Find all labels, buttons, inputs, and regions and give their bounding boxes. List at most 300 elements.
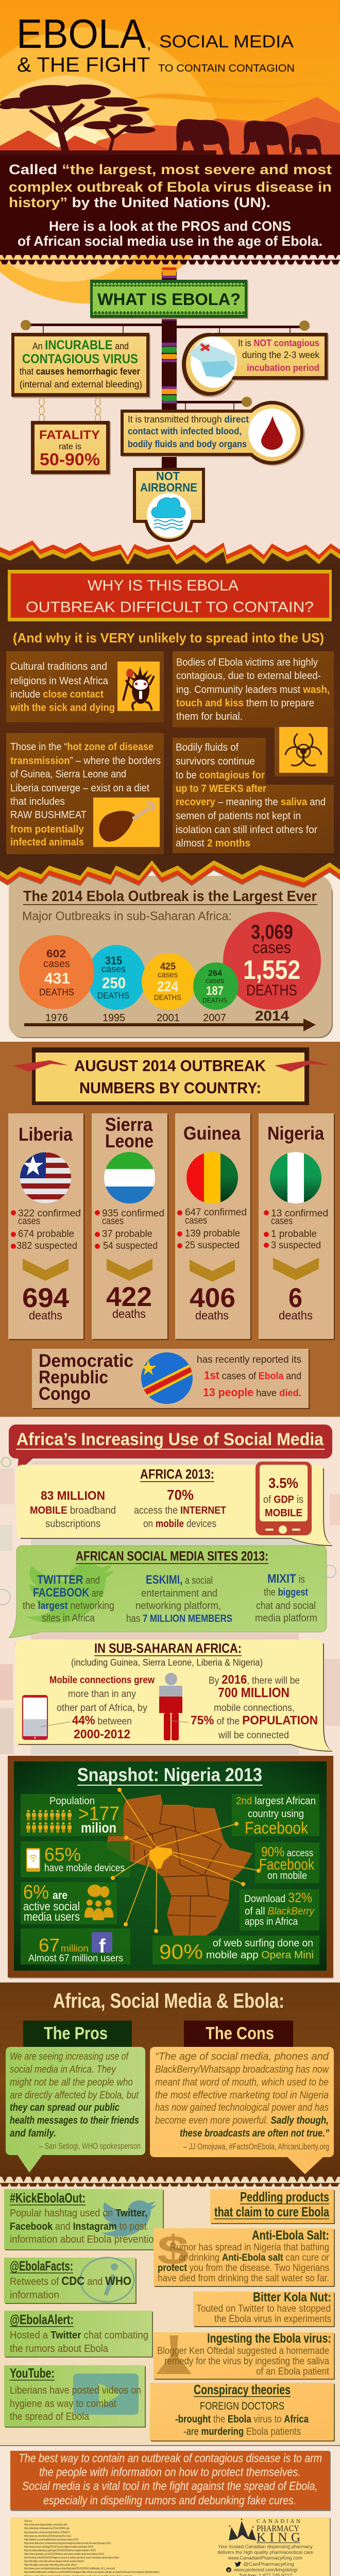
- panel: Sierra Leone: 422: [106, 1282, 152, 1312]
- panel: sub-Saharan Africa: other part of Africa, by: [57, 1703, 147, 1714]
- panel: Guinea: 406: [190, 1283, 235, 1313]
- panel: Sierra Leone: cases: [102, 1216, 124, 1227]
- panel: peddling products: [210, 2189, 335, 2224]
- stat: social media users: 6%: [23, 1882, 49, 1903]
- panel: the pros: We are seeing increasing use of: [10, 2051, 129, 2062]
- panel: anti-Ebola salt: or drinking Anti-Ebola salt can cure or: [179, 2252, 330, 2263]
- panel: largest outbreak bubbles: Major Outbreaks in sub-Saharan Africa:: [22, 909, 232, 923]
- icon: YouTube play watermark: [73, 2374, 139, 2415]
- sign: not airborne: [133, 468, 205, 542]
- panel: bodily fluids: survivors continue: [176, 756, 255, 767]
- timeline years: 1976: [45, 1012, 68, 1024]
- stat: Opera Mini: [159, 1938, 314, 1963]
- panel: Sierra Leone: 935 confirmed: [102, 1208, 164, 1219]
- company contact details: delivers the high quality pharmaceutical care: [217, 2550, 313, 2555]
- panel: KickEbolaOut: Facebook and Instagram to post: [10, 2221, 147, 2232]
- icon: information watermark: [80, 2258, 134, 2302]
- title: SOCIAL MEDIA: [159, 32, 294, 52]
- sources list: http://afrodigit.com/south-africas-largest-mobile-social-network/: [24, 2560, 84, 2563]
- panel: African social media sites: TWITTER and: [37, 1573, 100, 1587]
- panel: Democratic Republic Congo: Republic: [39, 1367, 108, 1387]
- stat: largest Facebook country: country using: [248, 1808, 304, 1820]
- panel: Sierra Leone: Sierra: [105, 1114, 153, 1135]
- sources list: Sources:: [24, 2520, 32, 2523]
- stat: BlackBerry apps: [244, 1890, 315, 1927]
- panel: African social media sites: the biggest: [264, 1587, 308, 1598]
- panel: KickEbolaOut: [4, 2189, 164, 2250]
- panel: KickEbolaOut: information about Ebola prevention: [10, 2234, 159, 2245]
- bubble 1995: DEATHS: [97, 991, 129, 1001]
- panel: Guinea: [175, 1113, 251, 1340]
- timeline years: 2007: [203, 1012, 226, 1024]
- map of Africa: [106, 1794, 252, 1936]
- signpost pole: [162, 267, 177, 468]
- panel: EbolaAlert: Hosted a Twitter chat combating: [10, 2330, 148, 2341]
- icon: blood drop: [261, 416, 283, 450]
- stat: largest Facebook country: Facebook: [245, 1819, 309, 1837]
- icon: mobile phone with GDP stat: 3.5%: [268, 1475, 298, 1491]
- icon: mobile phone with GDP stat: MOBILE: [265, 1507, 302, 1519]
- stat: largest Facebook country: [236, 1795, 316, 1837]
- panel: Democratic Republic Congo: 13 people have died.: [203, 1386, 301, 1399]
- panel: Guinea: Guinea: [183, 1123, 241, 1144]
- stat: Facebook users: million: [61, 1943, 89, 1954]
- sources list: http://afrodigit.com/social-networking-sites-south-africa/: [24, 2564, 77, 2567]
- panel: Sierra Leone: 37 probable: [102, 1229, 152, 1240]
- stat: social media users: [23, 1882, 113, 1923]
- bubble 1976: DEATHS: [39, 987, 74, 997]
- stat: Facebook users: 67: [39, 1935, 60, 1956]
- bubble 2014: cases: [252, 938, 291, 957]
- sources list: [24, 2520, 160, 2576]
- sources list: http://socialmediatoday.org/slogan/2014/02/03/african-digital-statistics-2014/: [24, 2549, 96, 2552]
- panel: EbolaAlert: the rumors about Ebola: [10, 2343, 109, 2354]
- icon: tribal mask: [117, 662, 160, 711]
- stat: social media users: media users: [24, 1910, 80, 1923]
- panel: hot zone bushmeat: transmission” – where the borders: [10, 755, 161, 767]
- sign: not contagious during incubation: It is NOT contagious: [238, 338, 319, 348]
- icon: person chart: [159, 1673, 182, 1740]
- panel: hot zone bushmeat: [6, 733, 164, 854]
- bubble 2001: cases: [158, 971, 178, 979]
- panel: Democratic Republic Congo: has recently reported its: [197, 1354, 301, 1365]
- panel: EbolaFacts: information: [10, 2290, 59, 2301]
- panel: EbolaFacts: @EbolaFacts:: [10, 2258, 73, 2274]
- sign: incurable virus: [11, 333, 150, 398]
- sources list: http://www.internetworldstats.com/africa.htm: [24, 2523, 67, 2527]
- intro pros and cons text: of African social media use in the age of Ebola.: [18, 233, 322, 249]
- icon: phone wifi: [26, 1848, 40, 1872]
- panel: conspiracy theories: [150, 2382, 335, 2442]
- panel: Sierra Leone: Leone: [105, 1130, 154, 1151]
- panel: bodily fluids: [173, 738, 334, 853]
- title: [16, 11, 295, 76]
- bubble 2007: 187: [206, 984, 224, 998]
- panel: African social media sites: has 7 MILLION MEMBERS: [126, 1613, 232, 1624]
- panel: the pros: and family.: [10, 2128, 56, 2139]
- zigzag divider: [0, 855, 340, 888]
- icon: flask watermark: [156, 2335, 192, 2374]
- panel: bodies of victims: them for burial.: [176, 711, 243, 722]
- panel: biohazard: [275, 727, 334, 776]
- panel: Guinea: 25 suspected: [185, 1240, 240, 1251]
- section: Africa, social media and Ebola: [0, 1982, 340, 2187]
- stat: population: Population: [49, 1795, 95, 1807]
- panel: sub-Saharan Africa: will be connected: [218, 1730, 289, 1741]
- company contact details: [217, 2544, 313, 2576]
- faint social media background icons: [0, 1458, 340, 1755]
- arrow: timeline: [24, 1019, 316, 1031]
- panel: snapshot Nigeria chalkboard: Snapshot: Nigeria 2013: [77, 1764, 262, 1785]
- company contact details: www.CanadianPharmacyKing.com: [228, 2555, 302, 2561]
- heading banner: OUTBREAK DIFFICULT TO CONTAIN?: [26, 599, 314, 616]
- bubble 2001: [142, 953, 196, 1010]
- panel: bitter kola nut: [193, 2290, 335, 2327]
- intro maroon block: [0, 155, 340, 265]
- panel: hot zone bushmeat: from potentially: [10, 824, 84, 835]
- panel: the pros: social media in Africa. They: [10, 2064, 116, 2075]
- panel: conspiracy theories: FOREIGN DOCTORS: [200, 2400, 284, 2412]
- title: EBOLA: [16, 11, 146, 57]
- icon: large acacia tree: [0, 84, 149, 152]
- panel: Sierra Leone: deaths: [112, 1307, 146, 1320]
- stat: population: milion: [81, 1820, 116, 1836]
- title: ,: [147, 36, 151, 53]
- panel: bodily fluids: to be contagious for: [176, 770, 265, 781]
- footer panel: [10, 2517, 331, 2576]
- panel: EbolaFacts: Retweets of CDC and WHO: [10, 2274, 131, 2287]
- panel: Guinea: cases: [185, 1215, 207, 1226]
- stat: Opera Mini: 90%: [159, 1941, 203, 1963]
- sources list: http://reliefweb.int/disaster/ep-2014-000041-gin: [24, 2527, 70, 2530]
- intro quote text: complex outbreak of Ebola virus disease in: [9, 179, 332, 195]
- sign: fatality rate: [31, 421, 111, 475]
- timeline years: [45, 1008, 289, 1024]
- panel: sub-Saharan Africa: more than in any: [68, 1689, 136, 1700]
- panel: sub-Saharan Africa: 2000-2012: [74, 1727, 130, 1741]
- panel: bodies of victims: contagious, due to external bleed-: [176, 670, 321, 682]
- panel: Africa 2013: subscriptions: [45, 1518, 100, 1530]
- panel: African social media sites: ESKIMI, a social: [146, 1573, 213, 1587]
- panel: Nigeria: cases: [271, 1216, 293, 1227]
- panel: sub-Saharan Africa: mobile connections,: [214, 1703, 295, 1714]
- panel: bodily fluids: Bodily fluids of: [176, 742, 239, 753]
- heading board: outbreak by country: [13, 1047, 331, 1105]
- panel: Nigeria: 6: [288, 1283, 302, 1313]
- panel: YouTube: Liberians have posted videos on: [10, 2385, 141, 2396]
- icon: twitter: [235, 2562, 241, 2567]
- panel: sub-Saharan Africa: 44% between: [72, 1714, 132, 1727]
- icon: Sierra Leone flag: [103, 1152, 157, 1204]
- panel: sub-Saharan Africa: (including Guinea, Sierra Leone, Liberia & Nigeria): [71, 1657, 263, 1668]
- icon: population people: [26, 1810, 72, 1833]
- icon: mobile phone with GDP stat: of GDP is: [263, 1494, 303, 1505]
- stat: BlackBerry apps: of all BlackBerry: [245, 1906, 315, 1917]
- title: TO CONTAIN CONTAGION: [158, 63, 295, 74]
- company contact details: @CanPharmacyKing: [243, 2562, 294, 2567]
- panel: conspiracy theories: -are murdering Ebola patients: [183, 2426, 301, 2437]
- sign: not contagious during incubation: during the 2-3 week: [242, 350, 320, 360]
- panel: Guinea: deaths: [195, 1309, 229, 1322]
- panel: bodily fluids: almost 2 months: [176, 838, 250, 849]
- panel: African social media sites: networking platform,: [135, 1600, 221, 1612]
- brown section: why difficult to contain: [0, 540, 340, 868]
- icon: twitter bird watermark: [101, 2200, 157, 2236]
- sign: not airborne: NOT: [156, 469, 180, 483]
- sign: incurable virus: (internal and external bleeding): [20, 379, 142, 389]
- icon: tablet chart: [22, 1695, 48, 1740]
- icon: IV bag: [189, 342, 235, 378]
- signpost arms: [21, 320, 310, 410]
- sign: fatality rate: rate is: [59, 442, 81, 451]
- panel: YouTube: the spread of Ebola: [10, 2411, 90, 2422]
- panel: the pros: – Sari Setiogi, WHO spokesperson: [39, 2141, 141, 2151]
- panel: African social media sites: entertainment and: [141, 1588, 217, 1599]
- panel: ingesting the virus: of an Ebola patient: [256, 2366, 330, 2377]
- icon: mobile phone with GDP stat: [256, 1462, 312, 1535]
- stat: Facebook on mobile: on mobile: [267, 1870, 307, 1882]
- stat: population: [26, 1795, 120, 1836]
- intro quote text: Called “the largest, most severe and most: [9, 162, 332, 177]
- callout lines from Nigeria: [111, 1788, 261, 1933]
- sign: how it is transmitted: [121, 401, 305, 466]
- stat: Facebook on mobile: 90% access: [261, 1844, 313, 1859]
- icon: facebook: f: [99, 1936, 106, 1957]
- sign: what is ebola: WHAT IS EBOLA?: [97, 290, 241, 309]
- intro pros and cons text: Here is a look at the PROS and CONS: [49, 218, 291, 234]
- icon: twitter bird watermark: [26, 1563, 115, 1623]
- sign: how it is transmitted: contact with infected blood,: [128, 426, 242, 436]
- heading banner: [8, 570, 332, 621]
- panel: snapshot Nigeria chalkboard: [8, 1756, 333, 1978]
- icon: facebook: [92, 1932, 112, 1957]
- panel: African social media sites: MIXIT is: [267, 1572, 305, 1586]
- sign: how it is transmitted: It is transmitted through direct: [128, 414, 249, 425]
- bubble 2007: [193, 962, 239, 1010]
- icon: small acacia tree: [83, 114, 156, 154]
- conclusion banner: the people with information on how to protect themselves.: [39, 2465, 301, 2479]
- title: & THE FIGHT: [17, 54, 150, 76]
- sign: fatality rate: FATALITY: [39, 428, 100, 442]
- heading: The 2014 Ebola Outbreak is the Largest Ever: [23, 888, 317, 905]
- panel: Liberia: 674 probable: [18, 1229, 74, 1240]
- bubble 1976: 431: [44, 970, 70, 987]
- sign: how it is transmitted: bodily fluids and body organs: [128, 439, 247, 449]
- bubble 1995: cases: [101, 964, 126, 974]
- panel: Democratic Republic Congo: 1st cases of Ebola and: [204, 1369, 301, 1382]
- panel: Guinea: 139 probable: [185, 1228, 240, 1239]
- conclusion banner: especially in dispelling rumors and debunking fake cures.: [43, 2494, 296, 2507]
- panel: bodies of victims: Bodies of Ebola victims are highly: [176, 657, 318, 668]
- stat: Facebook on mobile: Facebook: [259, 1855, 314, 1873]
- panel: Nigeria: Nigeria: [267, 1123, 325, 1144]
- stat boxes: [21, 1794, 319, 1964]
- stat: BlackBerry apps: apps in Africa: [245, 1916, 298, 1927]
- sign: fatality rate: 50-90%: [40, 450, 100, 469]
- panel: Liberia: [8, 1113, 84, 1340]
- panel: the cons: [150, 2021, 334, 2174]
- logo: Canadian Pharmacy King: KING: [257, 2531, 300, 2545]
- panel: Democratic Republic Congo: [32, 1349, 310, 1409]
- panel: Guinea: 647 confirmed: [185, 1207, 247, 1218]
- panel: YouTube: hygiene as way to combat: [10, 2398, 116, 2410]
- panel: hot zone bushmeat: Those in the “hot zone of disease: [10, 741, 154, 753]
- icon: DRC flag: [141, 1352, 193, 1404]
- bubble 2014: 1,552: [243, 955, 300, 985]
- timeline years: 2001: [157, 1012, 180, 1024]
- logo: Canadian Pharmacy King: PHARMACY: [257, 2523, 299, 2533]
- panel: hot zone bushmeat: Liberia converge – exist on a diet: [10, 783, 149, 794]
- panel: African social media sites: AFRICAN SOCIAL MEDIA SITES 2013:: [76, 1548, 268, 1564]
- panel: bodies of victims: touch and kiss them to prepare: [176, 698, 314, 709]
- panel: African social media sites: chat and social: [256, 1600, 316, 1612]
- panel: hot zone bushmeat: infected animals: [10, 837, 84, 848]
- stat: Opera Mini: of web surfing done on: [213, 1938, 313, 1949]
- panel: the pros: are directly affected by Ebola, but: [10, 2090, 139, 2101]
- sources list: http://techloy.com/2013/10/21/nigeria-crosses-6-million-facebook-users-overtakes-south-africa-stats/: [24, 2556, 119, 2560]
- stat: Facebook on mobile: [259, 1844, 314, 1882]
- icon: second elephant: [240, 121, 291, 155]
- panel: hot zone bushmeat: RAW BUSHMEAT: [10, 809, 87, 821]
- panel: the cons: become even more powerful. Sadly though,: [155, 2115, 329, 2126]
- icon: dollar watermark: $: [157, 2227, 189, 2273]
- panel: the cons: “The age of social media, phones and: [155, 2051, 329, 2062]
- panel: Sierra Leone: 54 suspected: [103, 1241, 158, 1251]
- stat: social media users: active social: [23, 1900, 80, 1913]
- panel: EbolaAlert: @EbolaAlert:: [10, 2312, 74, 2327]
- panel: sub-Saharan Africa: Mobile connections grew: [49, 1675, 155, 1686]
- icon: Guinea flag: [185, 1152, 239, 1205]
- heading: Africa, Social Media & Ebola:: [53, 1990, 284, 2012]
- panel: sub-Saharan Africa: [15, 1640, 333, 1752]
- bubble 1976: cases: [43, 958, 70, 970]
- panel: hot zone bushmeat: of Guinea, Sierra Leone and: [10, 769, 126, 780]
- stat: largest Facebook country: 2nd largest African: [236, 1795, 316, 1807]
- panel: Africa 2013: MOBILE broadband: [30, 1505, 116, 1516]
- sign: not airborne: AIRBORNE: [140, 481, 197, 494]
- stat: population: >177: [78, 1803, 120, 1825]
- sources list: http://wearesocial.net/blog/2014/01/social-digital-mobile-worldwide-2014/: [24, 2546, 93, 2549]
- panel: Liberia: 322 confirmed: [18, 1208, 81, 1219]
- sign: what is ebola: [90, 280, 248, 319]
- panel: KickEbolaOut: Popular hashtag used on Twitter,: [10, 2208, 147, 2219]
- header: savanna sunset scene: [0, 0, 340, 303]
- panel: bodies of victims: [173, 651, 334, 727]
- bubble 2007: 264: [208, 969, 222, 978]
- company contact details: www.pinterest.com/kingsblog/: [233, 2567, 298, 2573]
- panel: sub-Saharan Africa: IN SUB-SAHARAN AFRICA:: [94, 1640, 242, 1656]
- logo: Canadian Pharmacy King: [229, 2518, 300, 2545]
- panel: African social media sites: media platform: [255, 1613, 317, 1624]
- panel: the pros: might not be all the people who: [10, 2077, 133, 2088]
- timeline years: 1995: [103, 1012, 125, 1024]
- panel: Democratic Republic Congo: Democratic: [39, 1351, 133, 1371]
- stat: social media users: are: [53, 1889, 67, 1902]
- panel: Africa 2013: access the INTERNET: [134, 1505, 226, 1516]
- icon: Liberia flag: [20, 1152, 72, 1204]
- panel: Liberia: deaths: [29, 1309, 62, 1322]
- sources list: http://www.iamwire.com/2012/06/facts-and-stats-mobile-web-west-africa-2012/: [24, 2553, 105, 2556]
- panel: Sierra Leone: [92, 1113, 168, 1340]
- stat: Opera Mini: mobile app Opera Mini: [206, 1950, 314, 1961]
- panel: hot zone bushmeat: that includes: [10, 796, 65, 807]
- panel: KickEbolaOut: #KickEbolaOut:: [10, 2190, 86, 2206]
- panel: Africa 2013: 70%: [167, 1487, 194, 1503]
- panel: EbolaAlert: [4, 2311, 153, 2358]
- sign: incurable virus: CONTAGIOUS VIRUS: [22, 352, 138, 366]
- bubble 1976: 602: [46, 948, 66, 960]
- panel: bodies of victims: ing. Community leaders must wash,: [176, 684, 330, 696]
- icon: biohazard symbol: [284, 734, 323, 768]
- icon: people chatting: [84, 1885, 113, 1920]
- panel: bodily fluids: semen of patients not kept in: [176, 810, 301, 822]
- panel: Nigeria: deaths: [279, 1309, 313, 1322]
- banner: Africa's increasing use of social media: Africa’s Increasing Use of Social Media: [16, 1430, 324, 1449]
- bubble 1995: 315: [105, 954, 122, 967]
- panel: Liberia: cases: [18, 1216, 40, 1227]
- icon: baby elephant: [289, 134, 322, 155]
- panel: cultural traditions: [6, 651, 164, 722]
- bubble 2001: 425: [160, 961, 176, 972]
- intro quote text: [9, 162, 332, 210]
- panel: ingesting the virus: [154, 2331, 335, 2380]
- panel: sub-Saharan Africa: 75% of the POPULATION: [191, 1714, 318, 1727]
- bubble 1995: [87, 945, 146, 1010]
- bubble 2007: DEATHS: [202, 996, 227, 1004]
- sign: incurable virus: An INCURABLE and: [32, 338, 129, 352]
- icon: Nigeria flag: [269, 1152, 322, 1205]
- stat: BlackBerry apps: Download 32%: [244, 1890, 312, 1905]
- intro pros and cons text: [18, 218, 322, 249]
- banner: Africa's increasing use of social media: [9, 1425, 332, 1472]
- panel: sub-Saharan Africa: 700 MILLION: [218, 1685, 290, 1700]
- panel: Nigeria: 1 probable: [271, 1229, 317, 1240]
- panel: largest outbreak bubbles: [9, 876, 333, 1038]
- logo: Canadian Pharmacy King: CANADIAN: [257, 2518, 300, 2524]
- panel: the pros: The Pros: [44, 2024, 108, 2043]
- section: country numbers: [0, 1042, 340, 1417]
- stat: Facebook users: [28, 1932, 123, 1964]
- panel: sub-Saharan Africa: By 2016, there will be: [209, 1673, 300, 1687]
- panel: African social media sites: FACEBOOK are: [33, 1586, 104, 1600]
- subheading: (And why it is VERY unlikely to spread into the US): [13, 630, 324, 646]
- heading board: outbreak by country: NUMBERS BY COUNTRY:: [79, 1079, 261, 1097]
- panel: EbolaFacts: [4, 2258, 137, 2304]
- panel: bodily fluids: up to 7 WEEKS after: [176, 783, 266, 794]
- sources list: http://www.gsma.com/publicpolicy/wp-content/uploads/2012/03/SSA_FullReport_v6.1_clean.pdf: [24, 2567, 115, 2570]
- bubble 2014: DEATHS: [246, 982, 297, 999]
- bubble 1976: [19, 935, 94, 1009]
- icon: adult elephant: [172, 119, 231, 155]
- intro quote text: history” by the United Nations (UN).: [9, 195, 270, 210]
- panel: bitter kola nut: Touted on Twitter to have stopped: [196, 2303, 331, 2314]
- bubble 2001: DEATHS: [154, 993, 181, 1002]
- panel: YouTube: YouTube:: [10, 2365, 55, 2381]
- sources list: http://allafrica.com/health/ebola-virus/fact-sheet-2474: [24, 2538, 78, 2541]
- panel: cultural traditions: religions in West Africa: [10, 675, 109, 687]
- panel: African social media sites: the largest networking: [23, 1600, 114, 1612]
- panel: Africa 2013: 83 MILLION: [41, 1489, 105, 1503]
- sources list: http://www.slideshare.net/wearesocialsg/social-digital-mobile-around-the-world-january-2014: [24, 2542, 111, 2545]
- panel: Africa 2013: [16, 1462, 333, 1546]
- panel: bodily fluids: recovery – meaning the saliva and: [176, 796, 326, 808]
- stat: mobile devices: have mobile devices: [44, 1862, 125, 1874]
- panel: Liberia: Liberia: [19, 1124, 73, 1145]
- panel: Liberia: 382 suspected: [16, 1241, 77, 1251]
- heading board: outbreak by country: AUGUST 2014 OUTBREAK: [74, 1057, 266, 1075]
- panel: the pros: health messages to their friends: [10, 2115, 139, 2126]
- company contact details: Your trusted Canadian dispensing pharmacy: [218, 2544, 313, 2550]
